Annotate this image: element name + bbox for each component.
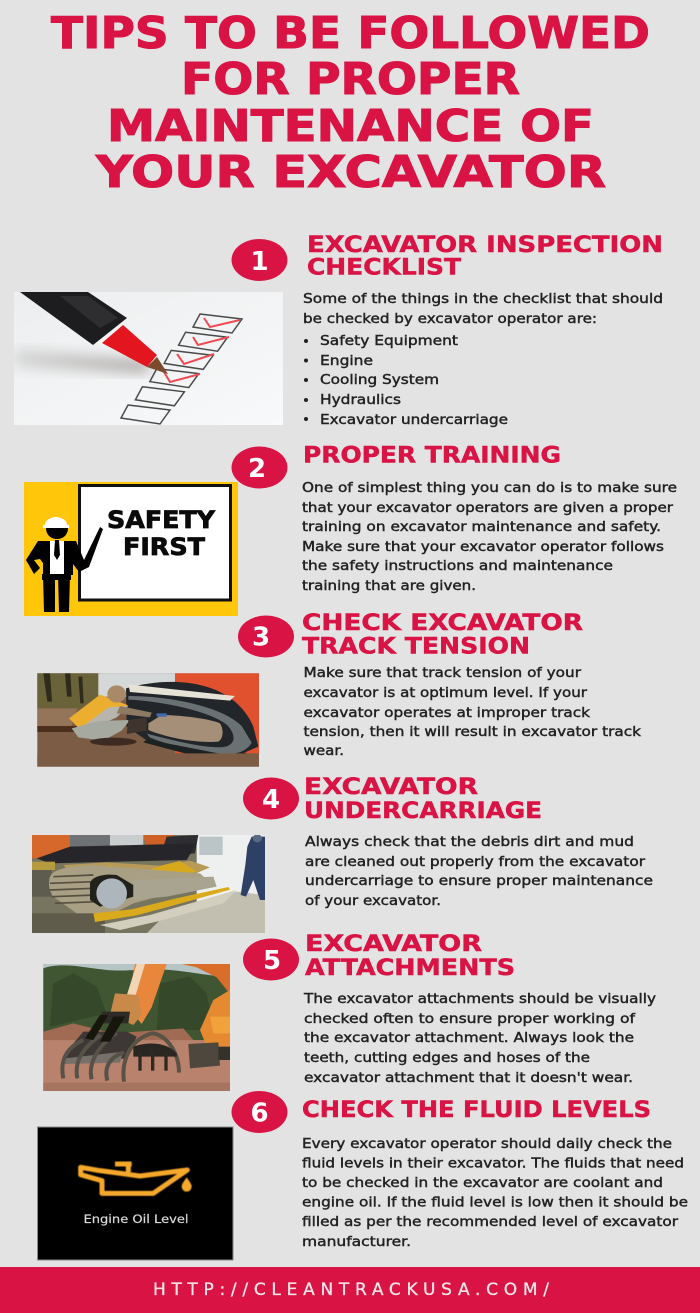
checklist bullets: Engine	[320, 354, 373, 369]
body text: training that are given.	[302, 579, 476, 594]
body text: are cleaned out properly from the excavator	[305, 855, 646, 870]
panel: excavator inspection checklist	[14, 233, 663, 428]
title: YOUR EXCAVATOR	[95, 147, 606, 198]
photo: pen and checklist	[14, 292, 283, 425]
body text: excavator attachment that it doesn't wear.	[304, 1071, 633, 1086]
checklist bullets: Hydraulics	[320, 393, 401, 408]
heading	[305, 932, 515, 981]
body text: The excavator attachments should be visually	[303, 992, 656, 1007]
number badge 1: 1	[250, 247, 269, 277]
number badge 5: 5	[263, 946, 281, 976]
intro text: Some of the things in the checklist that should	[303, 292, 663, 307]
number badge 2: 2	[248, 454, 266, 484]
body text	[302, 1137, 688, 1250]
body text: engine oil. If the fluid level is low then it should be	[302, 1196, 688, 1210]
number badge 6	[232, 1091, 288, 1133]
body text: Make sure that track tension of your	[304, 666, 582, 681]
body text: manufacturer.	[302, 1235, 411, 1250]
heading: PROPER TRAINING	[303, 444, 561, 468]
checklist bullets: Excavator undercarriage	[320, 413, 508, 428]
number badge 3: 3	[252, 622, 270, 652]
body text: training on excavator maintenance and safety.	[302, 520, 661, 535]
checklist bullets	[304, 334, 508, 428]
body text: to be checked in the excavator are coolant and	[302, 1176, 663, 1191]
panel: check the fluid levels	[38, 1091, 688, 1260]
body text: of your excavator.	[305, 894, 441, 909]
heading: ATTACHMENTS	[305, 956, 515, 981]
body text: filled as per the recommended level of excavator	[302, 1215, 679, 1230]
number badge 4: 4	[262, 785, 280, 815]
body text: tension, then it will result in excavator track	[304, 725, 642, 740]
photo: excavator grapple attachment	[43, 964, 230, 1091]
body text: Every excavator operator should daily check the	[302, 1137, 672, 1152]
number badge 3	[238, 616, 294, 658]
title	[51, 8, 650, 198]
illustration: engine oil level warning: Engine Oil Level	[84, 1212, 188, 1226]
number badge 5	[243, 938, 299, 980]
body text	[302, 481, 677, 594]
body text	[305, 835, 653, 909]
title: MAINTENANCE OF	[107, 101, 594, 152]
panel: excavator undercarriage	[32, 775, 653, 933]
number badge 6: 6	[250, 1098, 269, 1128]
heading: EXCAVATOR INSPECTION	[307, 233, 663, 258]
icon: worker figure	[26, 517, 103, 612]
heading: CHECK EXCAVATOR	[302, 611, 583, 636]
illustration: engine oil level warning	[38, 1127, 233, 1260]
body text: checked often to ensure proper working of	[304, 1012, 635, 1027]
body text: the excavator attachment. Always look the	[304, 1031, 634, 1046]
intro text: be checked by excavator operator are:	[303, 312, 597, 327]
body text: teeth, cutting edges and hoses of the	[304, 1051, 590, 1066]
footer banner	[0, 1267, 700, 1313]
number badge 2	[232, 446, 288, 488]
heading: EXCAVATOR	[304, 775, 478, 800]
heading	[304, 775, 542, 824]
panel: proper training	[24, 444, 677, 616]
body text: the safety instructions and maintenance	[302, 559, 613, 574]
number badge 1	[232, 239, 288, 281]
intro text	[303, 292, 663, 327]
body text: fluid levels in their excavator. The fluids that need	[302, 1156, 684, 1172]
body text: Make sure that your excavator operator follows	[302, 540, 664, 555]
illustration: safety first sign	[24, 482, 238, 616]
body text: wear.	[304, 744, 344, 759]
body text: excavator operates at improper track	[304, 706, 591, 721]
heading: TRACK TENSION	[302, 634, 530, 660]
body text	[303, 992, 656, 1086]
checklist bullets: Cooling System	[320, 373, 439, 388]
photo: worker checking track	[37, 673, 259, 767]
illustration: safety first sign: FIRST	[123, 533, 206, 561]
body text: that your excavator operators are given a proper	[302, 501, 674, 516]
body text	[304, 666, 642, 759]
heading: UNDERCARRIAGE	[304, 799, 542, 824]
body text: Always check that the debris dirt and mud	[305, 835, 634, 850]
body text: undercarriage to ensure proper maintenance	[305, 874, 653, 889]
number badge 4	[243, 778, 299, 820]
heading	[307, 233, 663, 280]
illustration: safety first sign: SAFETY	[107, 506, 216, 534]
body text: One of simplest thing you can do is to make sure	[302, 481, 677, 496]
panel: excavator attachments	[43, 932, 656, 1091]
checklist bullets: Safety Equipment	[320, 334, 458, 349]
footer banner: HTTP://CLEANTRACKUSA.COM/	[153, 1280, 549, 1300]
heading: CHECK THE FLUID LEVELS	[302, 1098, 651, 1123]
icon: oil can	[81, 1164, 192, 1193]
title: TIPS TO BE FOLLOWED	[51, 8, 650, 59]
panel: check excavator track tension	[37, 611, 642, 767]
heading: CHECKLIST	[307, 256, 461, 280]
heading	[302, 611, 583, 660]
body text: excavator is at optimum level. If your	[304, 686, 588, 701]
heading: EXCAVATOR	[305, 932, 482, 957]
title: FOR PROPER	[181, 54, 520, 105]
photo: excavator undercarriage	[32, 834, 265, 933]
